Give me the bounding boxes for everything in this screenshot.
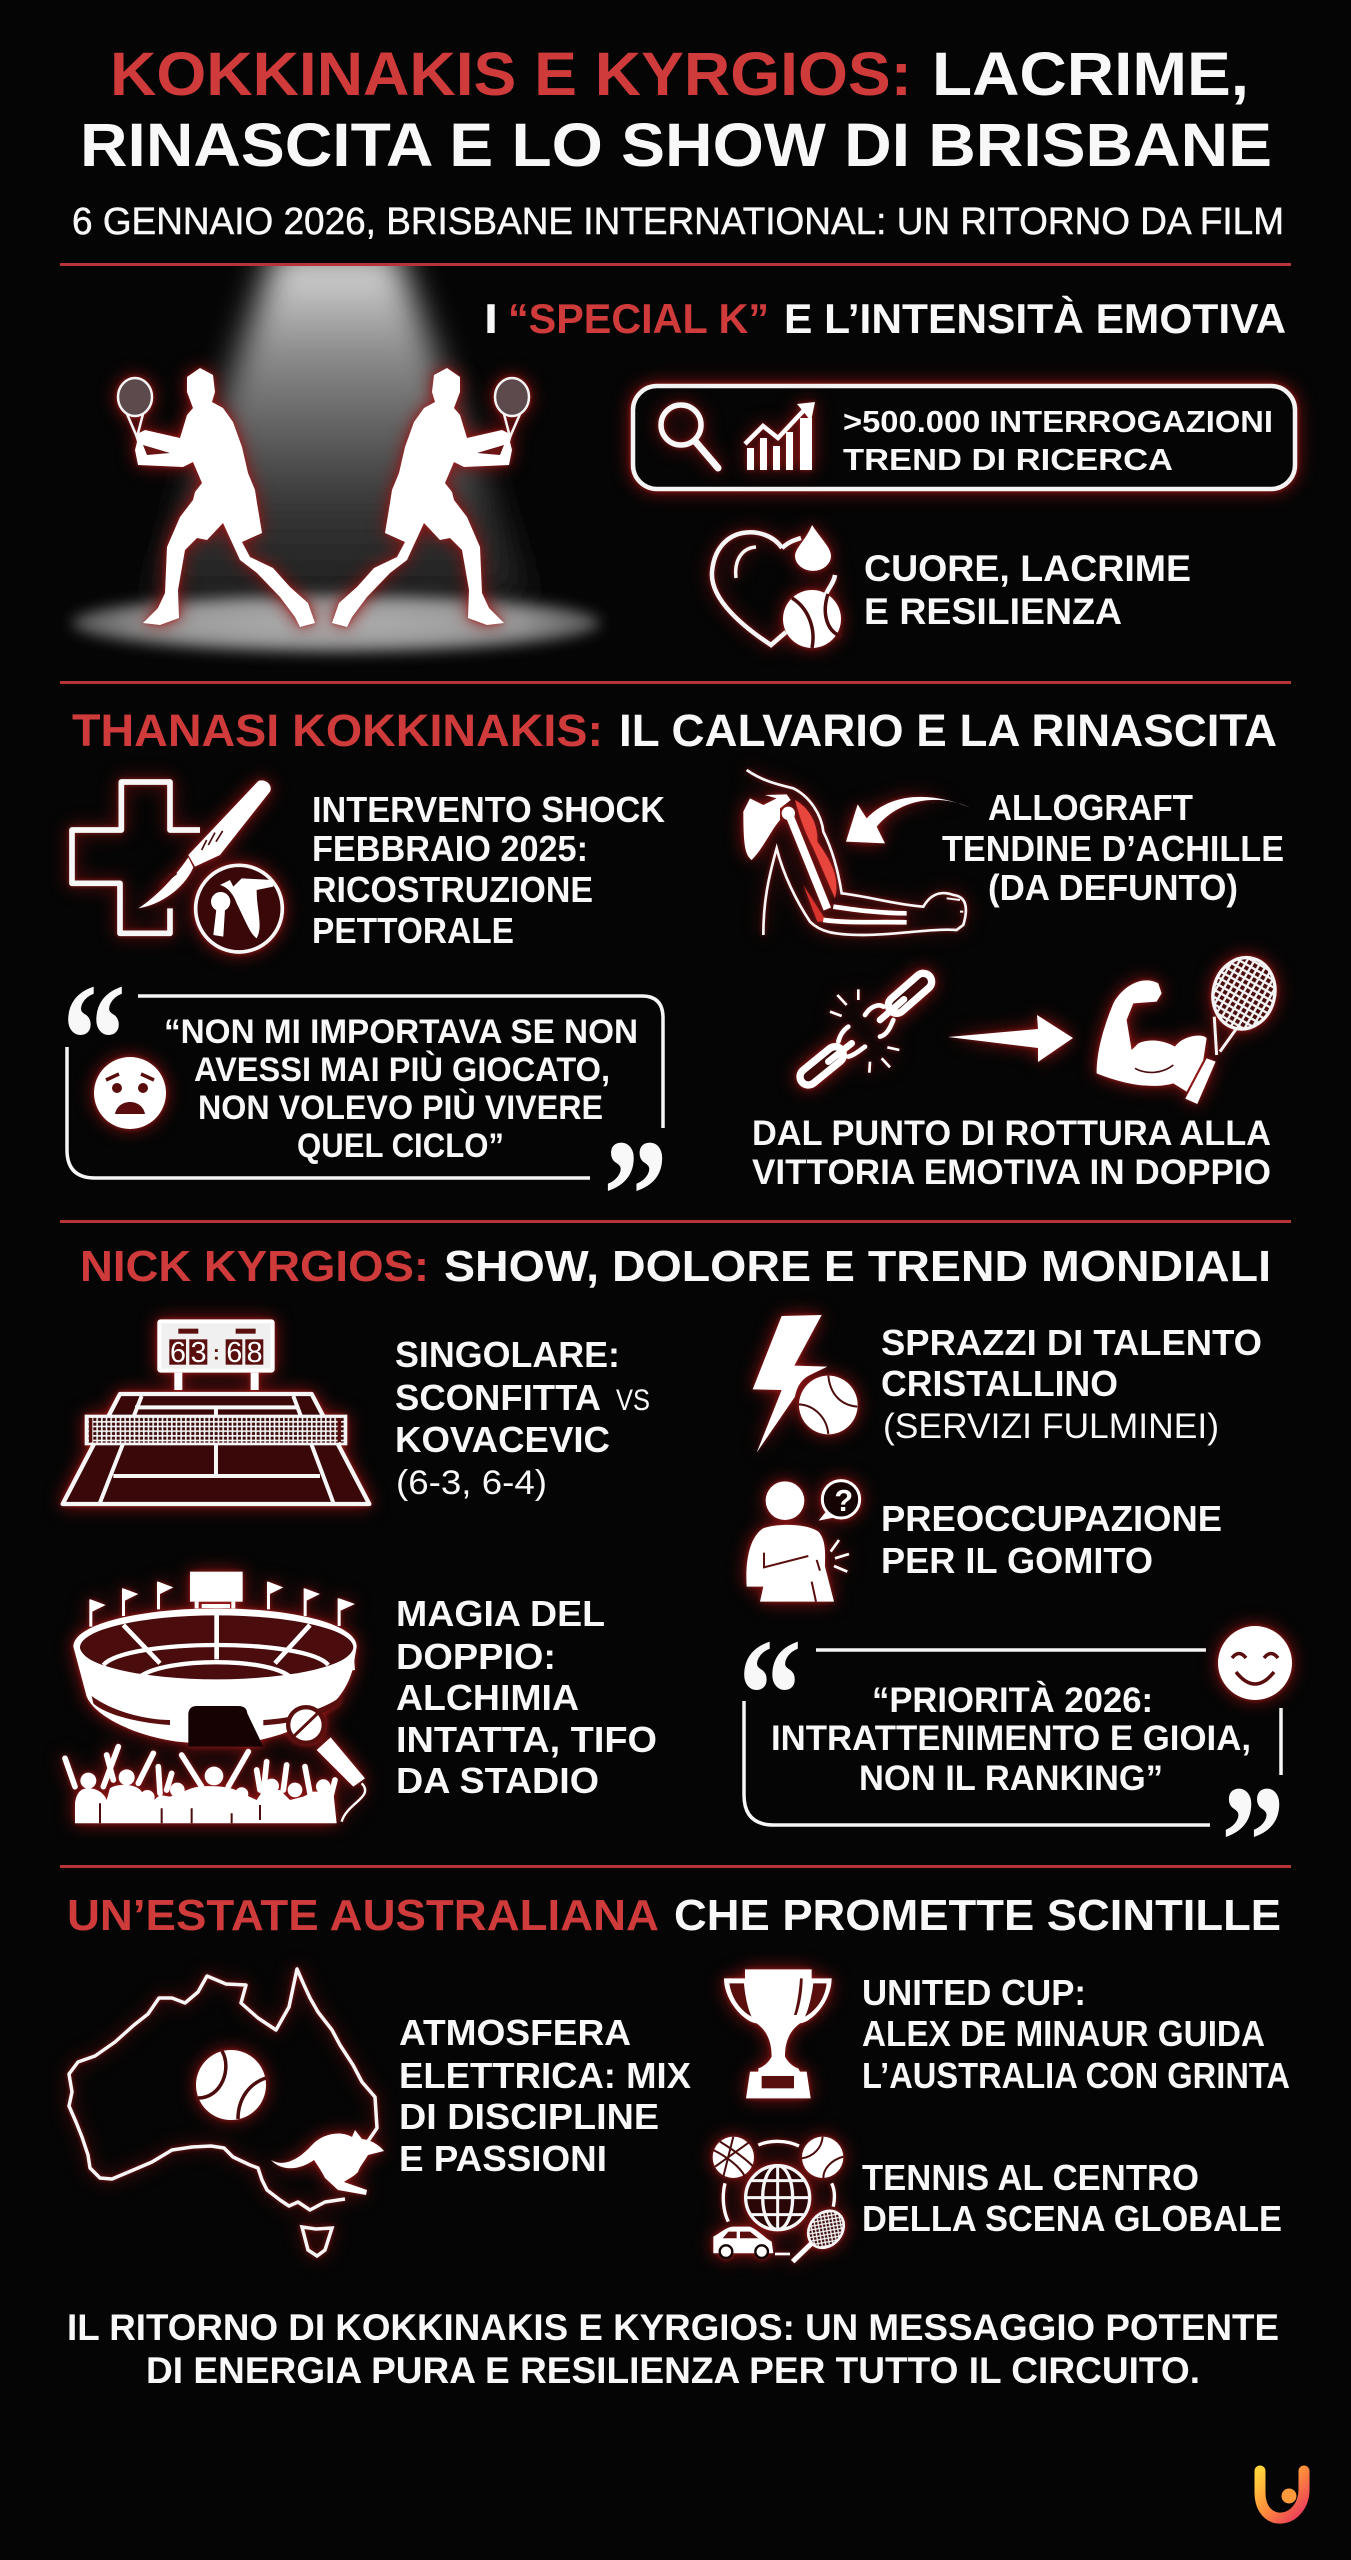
text: atmosfera elettrica: DI DISCIPLINE <box>399 2096 659 2137</box>
text: singolare: VS <box>616 1384 650 1417</box>
text: allograft: ALLOGRAFT <box>988 787 1193 828</box>
heading: Kokkinakis <box>72 705 1277 756</box>
heading: Kyrgios <box>80 1242 1271 1291</box>
text: interrogazioni: TREND DI RICERCA <box>843 442 1173 477</box>
heading: Kyrgios: SHOW, DOLORE E TREND MONDIALI <box>444 1242 1271 1291</box>
text: singolare: (6-3, 6-4) <box>396 1464 547 1502</box>
text: preoccupazione: PER IL GOMITO <box>881 1540 1153 1581</box>
text: united cup: L’AUSTRALIA CON GRINTA <box>862 2055 1290 2096</box>
icon: court and scoreboard: 6 <box>226 1337 242 1369</box>
heading: special K <box>484 295 1286 342</box>
text: singolare: KOVACEVIC <box>395 1419 610 1460</box>
heading: Kyrgios: NICK KYRGIOS: <box>80 1242 429 1291</box>
icon: magnifier <box>661 405 718 468</box>
icon: Australia map with ball and kangaroo <box>69 1969 384 2256</box>
text: cuore lacrime: E RESILIENZA <box>864 591 1122 632</box>
icon: left player silhouette <box>118 368 315 627</box>
text: united cup: ALEX DE MINAUR GUIDA <box>862 2013 1265 2054</box>
arrow: from break to victory <box>948 1015 1073 1062</box>
heading: special K: I <box>484 295 498 342</box>
footer message: IL RITORNO DI KOKKINAKIS E KYRGIOS: UN MESSAGGIO POTENTE <box>67 2307 1279 2348</box>
icon: broken chain <box>808 982 923 1077</box>
subtitle: 6 GENNAIO 2026, BRISBANE INTERNATIONAL: UN RITORNO DA FILM <box>72 201 1284 243</box>
text: quote: “PRIORITÀ 2026: <box>872 1680 1153 1720</box>
icon: arm anatomy with arrow <box>743 770 970 935</box>
text: punto di rottura: VITTORIA EMOTIVA IN DOPPIO <box>752 1153 1271 1192</box>
heading: Kokkinakis: IL CALVARIO E LA RINASCITA <box>619 705 1277 756</box>
panel: special K <box>72 250 1295 653</box>
icon: cross, scalpel and shoulder <box>72 780 282 952</box>
icon: stadium, crowd and microphone <box>65 1572 365 1823</box>
text: allograft <box>942 787 1284 908</box>
heading: estate australiana: CHE PROMETTE SCINTILLE <box>674 1891 1281 1940</box>
text: magia del doppio <box>396 1593 657 1801</box>
icon: closing quote: ” <box>1221 1752 1285 1930</box>
heading: special K: E L’INTENSITÀ EMOTIVA <box>784 295 1286 342</box>
icon: right player silhouette <box>332 368 529 627</box>
text: quote: NON IL RANKING” <box>859 1759 1163 1798</box>
icon: heart, tear and ball <box>712 525 841 648</box>
icon: court and scoreboard: : <box>213 1342 220 1364</box>
text: allograft: (DA DEFUNTO) <box>988 867 1238 908</box>
title: RINASCITA E LO SHOW DI BRISBANE <box>80 111 1272 179</box>
text: atmosfera elettrica <box>399 2012 691 2179</box>
text: atmosfera elettrica: ELETTRICA: MIX <box>399 2055 691 2096</box>
text: tennis al centro: DELLA SCENA GLOBALE <box>862 2198 1282 2239</box>
text: magia del doppio: ALCHIMIA <box>396 1677 579 1718</box>
text: magia del doppio: DOPPIO: <box>396 1636 556 1677</box>
text: magia del doppio: DA STADIO <box>396 1760 599 1801</box>
text: preoccupazione: PREOCCUPAZIONE <box>881 1498 1222 1539</box>
text: quote: INTRATTENIMENTO E GIOIA, <box>771 1719 1251 1758</box>
icon: opening quote: “ <box>62 950 126 1128</box>
text: atmosfera elettrica: ATMOSFERA <box>399 2012 631 2053</box>
text: sprazzi di talento: CRISTALLINO <box>881 1363 1118 1404</box>
title: KOKKINAKIS E KYRGIOS: <box>110 40 912 108</box>
text: intervento shock: RICOSTRUZIONE <box>312 869 593 910</box>
text: preoccupazione <box>881 1498 1222 1581</box>
text: magia del doppio: INTATTA, TIFO <box>396 1719 657 1760</box>
panel: Nick Kyrgios <box>63 1242 1292 1930</box>
text: sprazzi di talento: (SERVIZI FULMINEI) <box>883 1407 1219 1446</box>
icon: person with sore elbow <box>746 1481 860 1602</box>
icon: opening quote: “ <box>738 1605 802 1783</box>
text: intervento shock <box>312 789 665 951</box>
panel: Thanasi Kokkinakis <box>62 705 1284 1284</box>
text: singolare <box>395 1334 650 1502</box>
heading: estate australiana: UN’ESTATE AUSTRALIANA <box>67 1891 659 1940</box>
text: interrogazioni <box>843 404 1273 477</box>
text: tennis al centro <box>862 2157 1282 2239</box>
icon: trend chart <box>745 402 815 470</box>
icon: court and scoreboard <box>63 1319 369 1504</box>
text: united cup <box>862 1972 1290 2096</box>
heading: Kokkinakis: THANASI KOKKINAKIS: <box>72 705 603 756</box>
text: quote: AVESSI MAI PIÙ GIOCATO, <box>194 1051 610 1089</box>
icon: globe and sports <box>713 2137 851 2262</box>
text: quote: NON VOLEVO PIÙ VIVERE <box>198 1089 603 1127</box>
icon: closing quote: ” <box>603 1106 668 1284</box>
icon: sad face <box>94 1057 166 1129</box>
text: cuore lacrime: CUORE, LACRIME <box>864 548 1191 589</box>
text: united cup: UNITED CUP: <box>862 1972 1086 2013</box>
text: interrogazioni: >500.000 INTERROGAZIONI <box>843 404 1273 439</box>
icon: smiling face <box>1218 1626 1292 1700</box>
text: punto di rottura: DAL PUNTO DI ROTTURA ALLA <box>752 1114 1271 1153</box>
text: singolare: SCONFITTA <box>395 1377 601 1418</box>
text: sprazzi di talento: SPRAZZI DI TALENTO <box>881 1322 1262 1363</box>
footer message <box>67 2307 1279 2391</box>
text: quote <box>771 1680 1251 1798</box>
text: punto di rottura <box>752 1114 1271 1192</box>
panel: estate australiana <box>67 1891 1290 2262</box>
callout: Kokkinakis quote <box>62 950 668 1284</box>
title <box>80 40 1272 179</box>
spotlight <box>72 250 600 653</box>
icon: court and scoreboard: 3 <box>191 1337 207 1369</box>
crowd <box>75 1767 337 1823</box>
title: LACRIME, <box>932 40 1249 108</box>
heading: special K: “SPECIAL K” <box>508 295 769 342</box>
text: quote: QUEL CICLO” <box>297 1127 504 1165</box>
icon: trophy <box>724 1969 832 2098</box>
text: singolare: SINGOLARE: <box>395 1334 620 1375</box>
text: sprazzi di talento <box>881 1322 1262 1446</box>
text: magia del doppio: MAGIA DEL <box>396 1593 605 1634</box>
text: quote: “NON MI IMPORTAVA SE NON <box>164 1013 638 1051</box>
text: tennis al centro: TENNIS AL CENTRO <box>862 2157 1199 2198</box>
text: intervento shock: PETTORALE <box>312 910 514 951</box>
footer message: DI ENERGIA PURA E RESILIENZA PER TUTTO IL CIRCUITO. <box>146 2350 1200 2391</box>
icon: logo <box>1260 2471 1304 2518</box>
icon: person with sore elbow: ? <box>834 1484 853 1518</box>
heading: estate australiana <box>67 1891 1281 1940</box>
text: intervento shock: FEBBRAIO 2025: <box>312 828 588 869</box>
scoreboard digits: 6 <box>170 1337 186 1369</box>
text: allograft: TENDINE D’ACHILLE <box>942 828 1284 869</box>
icon: court and scoreboard: 8 <box>247 1337 263 1369</box>
callout: search trend <box>633 386 1295 489</box>
text: quote <box>164 1013 638 1165</box>
callout: Kyrgios quote <box>738 1605 1292 1930</box>
text: intervento shock: INTERVENTO SHOCK <box>312 789 665 830</box>
text: atmosfera elettrica: E PASSIONI <box>399 2138 607 2179</box>
icon: muscle and racket <box>1097 951 1283 1104</box>
icon: lightning bolt and ball <box>753 1315 858 1453</box>
text: cuore lacrime <box>864 548 1191 632</box>
